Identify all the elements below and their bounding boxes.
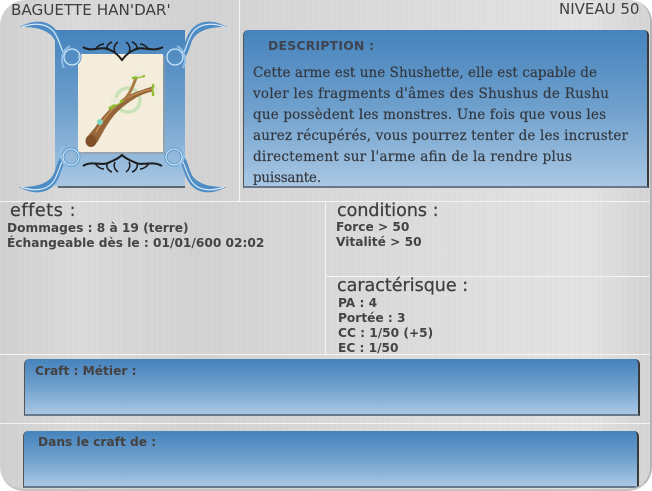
description text xyxy=(252,65,629,185)
item name: BAGUETTE HAN'DAR' xyxy=(11,1,171,19)
conditions list: Force > 50 xyxy=(336,220,409,234)
conditions heading: conditions : xyxy=(337,201,438,221)
conditions list: Vitalité > 50 xyxy=(336,235,422,249)
description text: directement sur l'arme afin de la rendre plus xyxy=(253,149,572,165)
icon: framed wand illustration xyxy=(19,22,227,192)
conditions list xyxy=(336,220,422,249)
black ornaments xyxy=(83,42,163,172)
characteristics list: PA : 4 xyxy=(338,296,377,310)
parchment xyxy=(78,54,165,154)
effects heading: effets : xyxy=(10,201,76,221)
wand xyxy=(86,71,158,147)
effects list: Échangeable dès le : 01/01/600 02:02 xyxy=(7,236,264,250)
characteristics heading: caractérisque : xyxy=(337,276,468,296)
used in craft label: Dans le craft de : xyxy=(38,435,156,449)
panel: craft job xyxy=(24,359,640,416)
characteristics list: EC : 1/50 xyxy=(338,341,399,355)
description text: que possèdent les monstres. Une fois que vous les xyxy=(253,107,606,123)
panel: description xyxy=(243,30,649,188)
craft job label: Craft : Métier : xyxy=(35,364,136,378)
characteristics list xyxy=(338,296,433,355)
description text: aurez récupérés, vous pourrez tenter de les incruster xyxy=(253,128,629,144)
effects list xyxy=(7,221,264,250)
panel: used in craft xyxy=(23,431,639,488)
description text: voler les fragments d'âmes des Shushus de Rushu xyxy=(252,86,609,102)
description text: Cette arme est une Shushette, elle est capable de xyxy=(253,65,597,81)
description heading: DESCRIPTION : xyxy=(268,39,374,53)
frame panel xyxy=(55,30,185,187)
corner flourishes xyxy=(19,22,227,192)
characteristics list: CC : 1/50 (+5) xyxy=(338,326,433,340)
item level: NIVEAU 50 xyxy=(559,0,639,18)
effects list: Dommages : 8 à 19 (terre) xyxy=(7,221,189,235)
characteristics list: Portée : 3 xyxy=(338,311,406,325)
